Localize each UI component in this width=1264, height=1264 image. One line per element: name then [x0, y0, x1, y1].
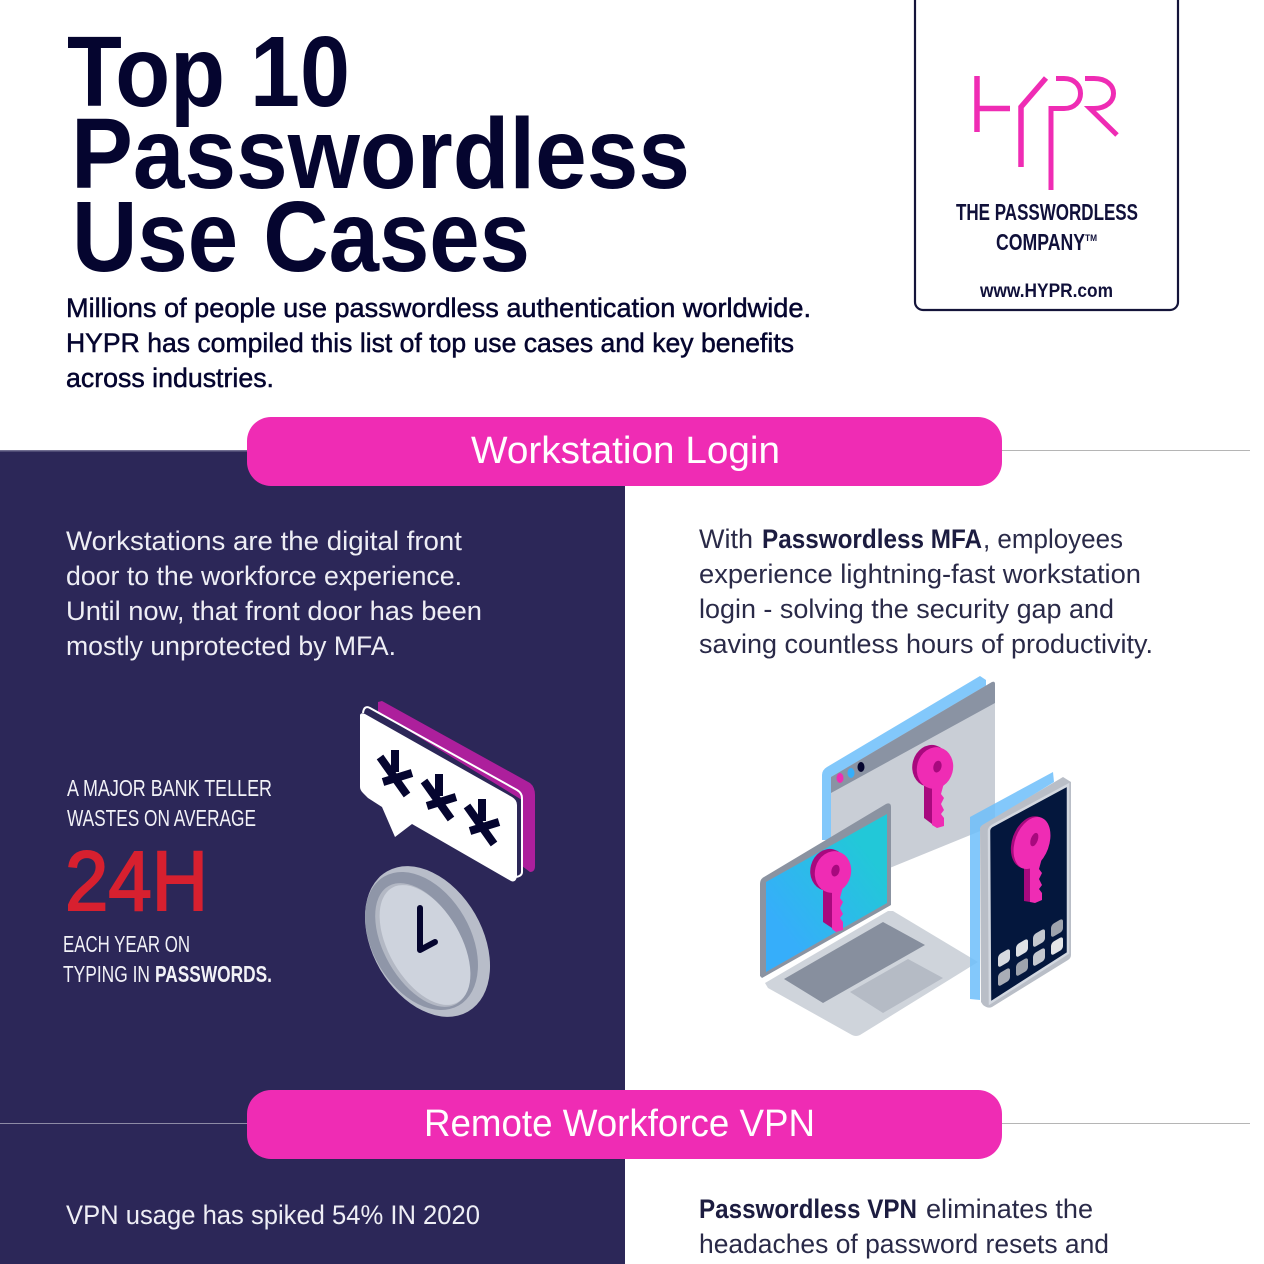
phone app grid	[998, 918, 1063, 987]
icon: clock	[339, 844, 516, 1039]
heading: Remote Workforce VPN	[247, 1090, 1002, 1159]
heading: Workstation Login	[247, 417, 1002, 486]
heading: Remote Workforce VPN: Remote Workforce VPN	[424, 1103, 815, 1145]
text block: workstation solution: , employees	[983, 524, 1123, 554]
statistic: 24H wasted: WASTES ON AVERAGE	[67, 805, 256, 831]
statistic: 24H wasted: EACH YEAR ON	[63, 931, 190, 957]
title	[67, 16, 690, 293]
text block: workstation problem: mostly unprotected by MFA.	[66, 631, 396, 661]
statistic: 24H wasted: TYPING IN	[63, 961, 150, 987]
text block: passwordless VPN	[699, 1194, 1109, 1259]
heading: Workstation Login: Workstation Login	[471, 430, 780, 472]
text block: workstation problem	[66, 526, 482, 661]
illustration: phone with key	[970, 772, 1071, 1008]
text block: workstation problem: Until now, that front door has been	[66, 596, 482, 626]
text block: workstation problem: door to the workforce experience.	[66, 561, 462, 591]
statistic: 24H wasted	[63, 775, 272, 987]
panel: dark left column	[0, 451, 625, 1264]
text block: workstation solution: With	[699, 524, 753, 554]
intro text: Millions of people use passwordless authentication worldwide.	[66, 293, 811, 323]
title: Use Cases	[72, 181, 530, 293]
logo tagline: THE PASSWORDLESS	[956, 199, 1138, 225]
title: Top 10	[67, 16, 350, 128]
intro text	[66, 293, 811, 393]
title: Passwordless	[71, 98, 690, 210]
text block: workstation solution	[699, 524, 1153, 659]
icon: HYPR logo	[977, 76, 1117, 190]
text block: passwordless VPN: headaches of password resets and	[699, 1229, 1109, 1259]
text block: workstation solution: saving countless hours of productivity.	[699, 629, 1153, 659]
text block: workstation solution: experience lightning-fast workstation	[699, 559, 1141, 589]
panel: logo card	[915, 0, 1178, 310]
illustration: laptop with key	[760, 803, 978, 1036]
text block: passwordless VPN: Passwordless VPN	[699, 1194, 917, 1224]
illustration: browser window with key	[822, 676, 995, 892]
logo tagline: TM	[1085, 233, 1097, 243]
text block: VPN usage: VPN usage has spiked 54% IN 2020	[66, 1200, 480, 1230]
icon: key	[806, 845, 856, 932]
logo url: www.HYPR.com	[979, 281, 1113, 302]
text block: passwordless VPN: eliminates the	[926, 1194, 1093, 1224]
intro text: across industries.	[66, 363, 274, 393]
logo tagline	[956, 199, 1138, 255]
intro text: HYPR has compiled this list of top use cases and key benefits	[66, 328, 794, 358]
icon: key	[1004, 811, 1057, 903]
text block: workstation problem: Workstations are the digital front	[66, 526, 462, 556]
logo tagline: COMPANY	[996, 229, 1085, 255]
icon: key	[908, 741, 958, 828]
statistic: 24H wasted: PASSWORDS.	[155, 961, 272, 987]
statistic: 24H wasted: A MAJOR BANK TELLER	[67, 775, 272, 801]
statistic: 24H wasted: 24H	[65, 834, 208, 928]
text block: workstation solution: login - solving the security gap and	[699, 594, 1114, 624]
icon: password chat bubble	[360, 701, 535, 881]
text block: workstation solution: Passwordless MFA	[762, 524, 982, 554]
